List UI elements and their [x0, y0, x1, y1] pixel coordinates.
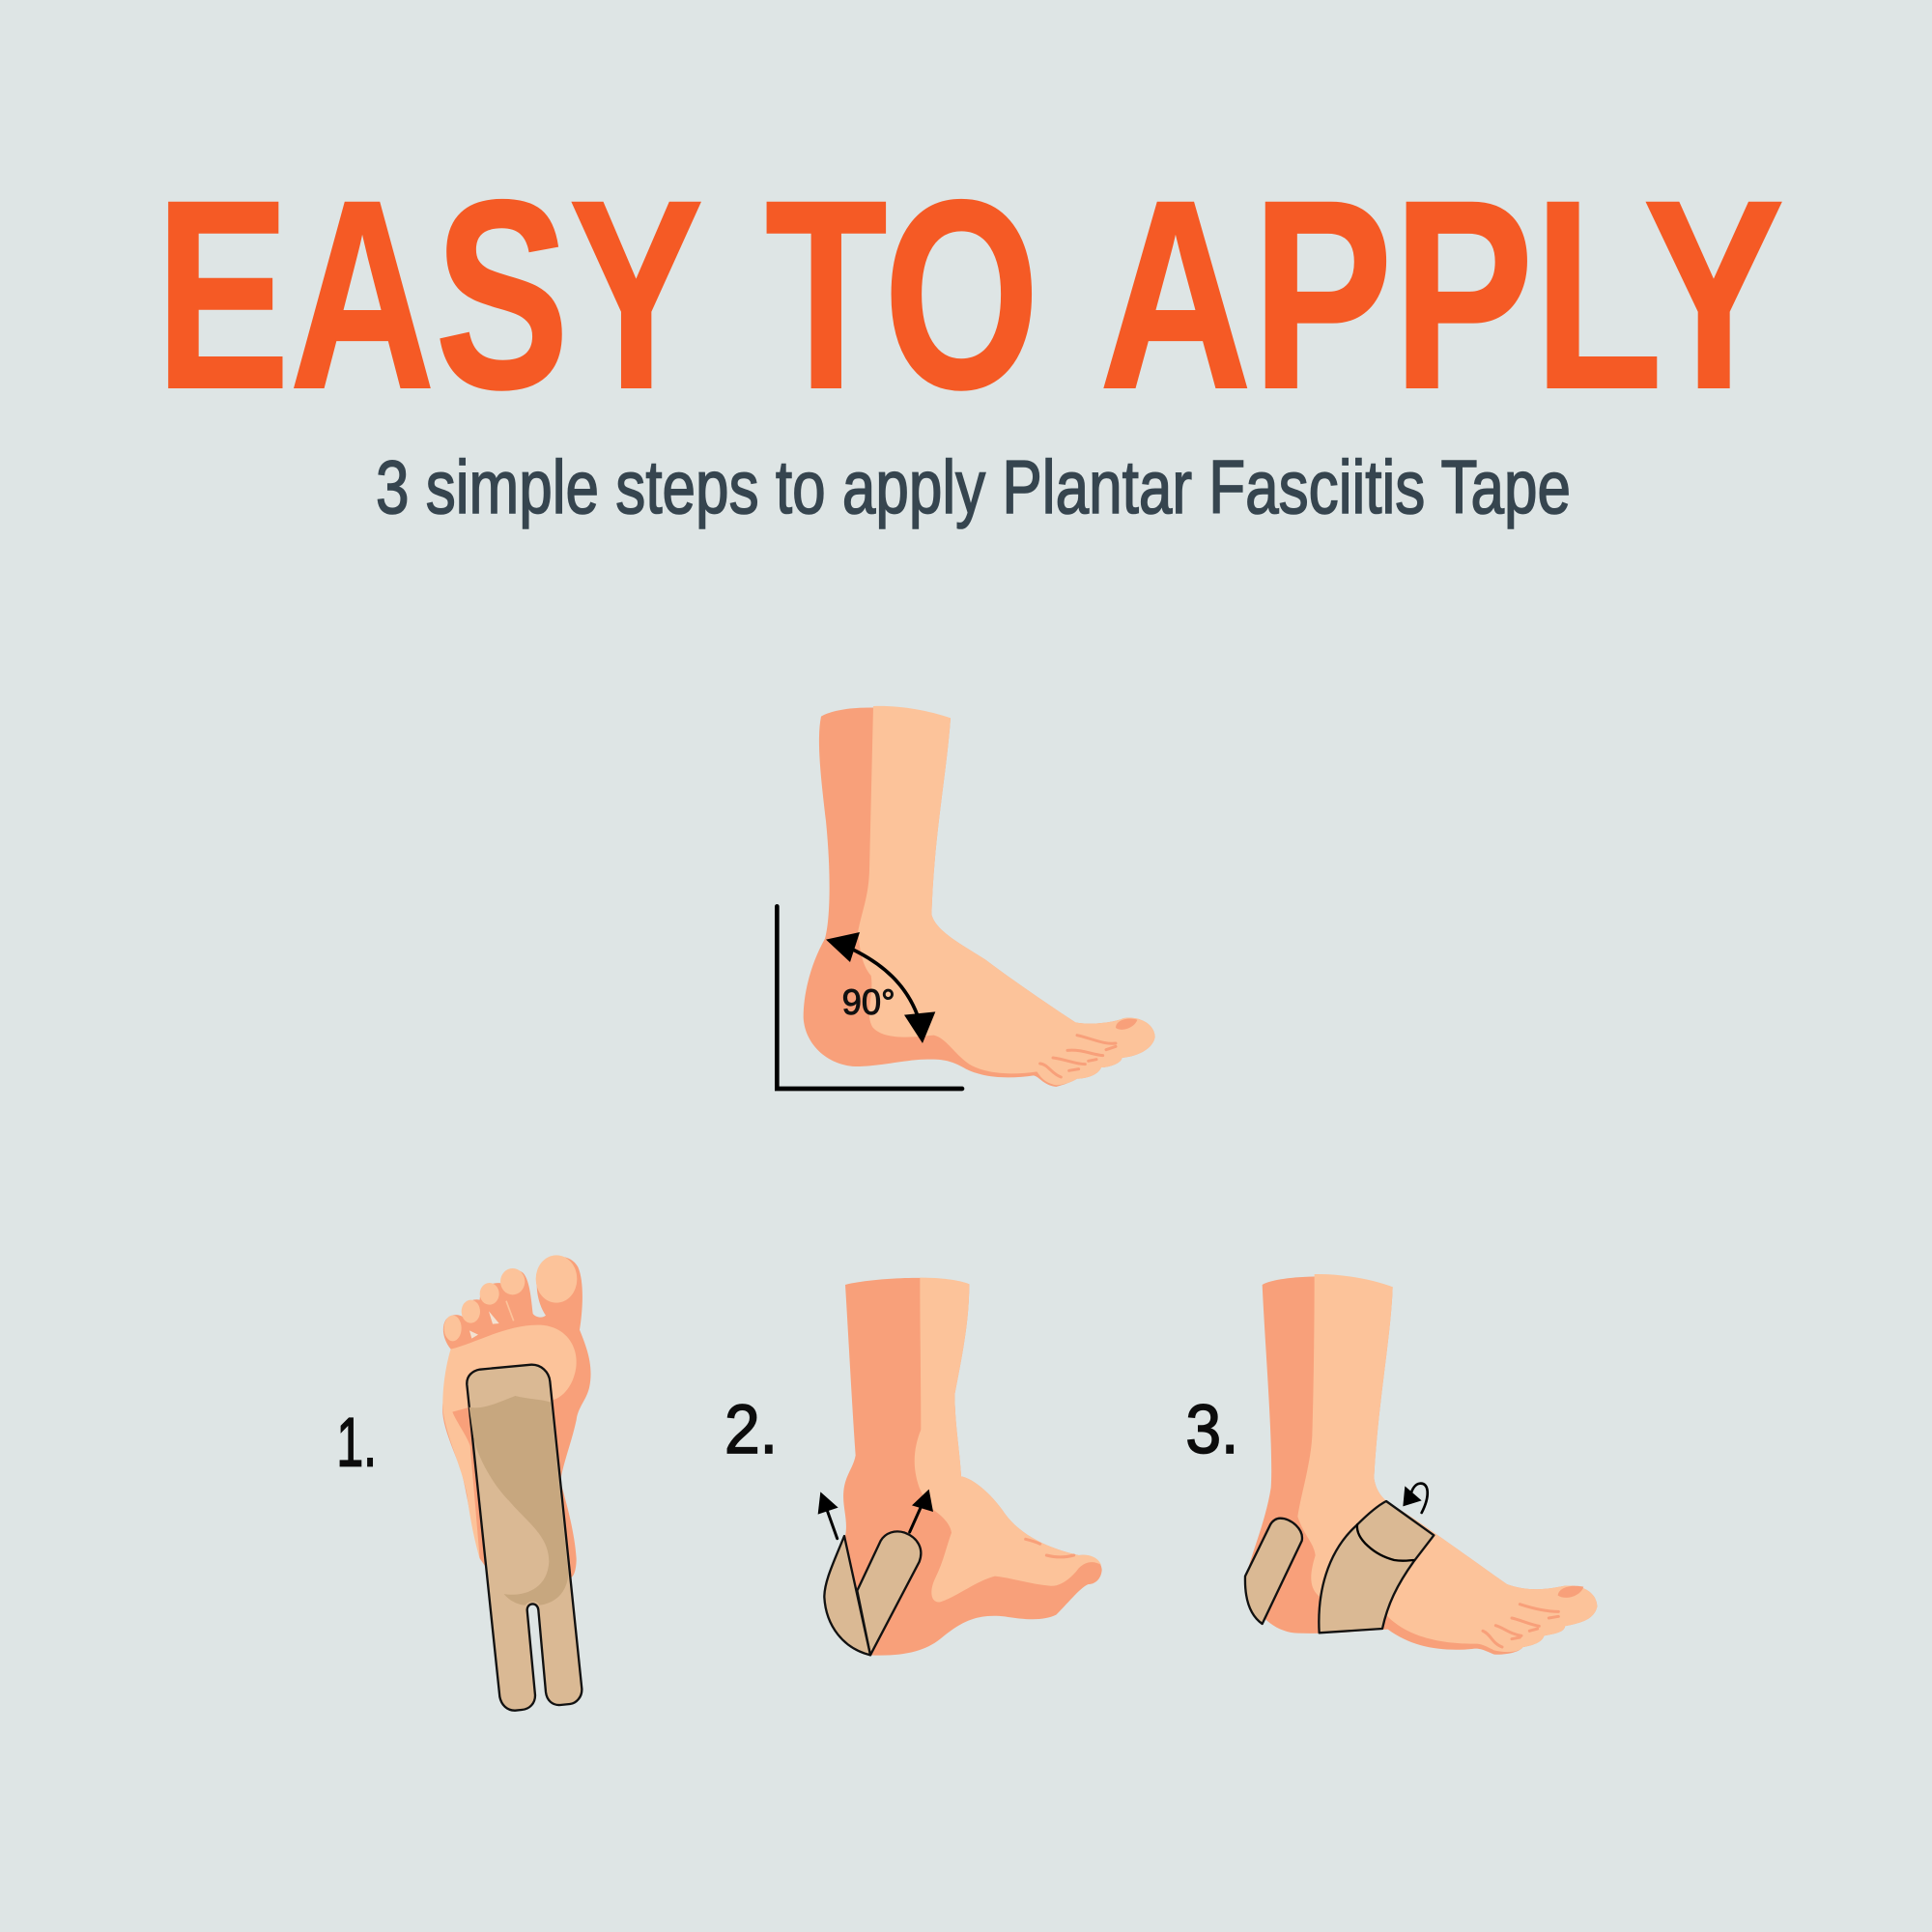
sole of foot [442, 1255, 591, 1591]
tape heel piece [1245, 1519, 1302, 1624]
subtitle: 3 simple steps to apply Plantar Fasciitis Tape [376, 444, 1571, 529]
tape strip [467, 1365, 582, 1711]
illustration: foot at 90 degrees [777, 706, 1155, 1089]
step 1 [336, 1255, 591, 1711]
step 3 [1185, 1274, 1597, 1655]
tape tabs [824, 1531, 921, 1655]
angle label: 90° [842, 981, 895, 1022]
step 2 [724, 1278, 1102, 1656]
foot visible under tape [469, 1396, 568, 1605]
axis lines [777, 906, 962, 1089]
title: TO [765, 144, 1039, 444]
foot side view [843, 1278, 1102, 1656]
tape wrap [1319, 1501, 1434, 1633]
curved arrow [1403, 1484, 1428, 1513]
step number 3: 3. [1185, 1391, 1238, 1468]
step number 1: 1. [336, 1404, 377, 1481]
title [156, 144, 1784, 444]
arrow left [818, 1492, 838, 1539]
title: EASY [156, 144, 703, 444]
step number 2: 2. [724, 1391, 778, 1468]
angle arrow [826, 932, 935, 1043]
foot side view [1246, 1274, 1597, 1655]
arrow right [910, 1490, 933, 1532]
